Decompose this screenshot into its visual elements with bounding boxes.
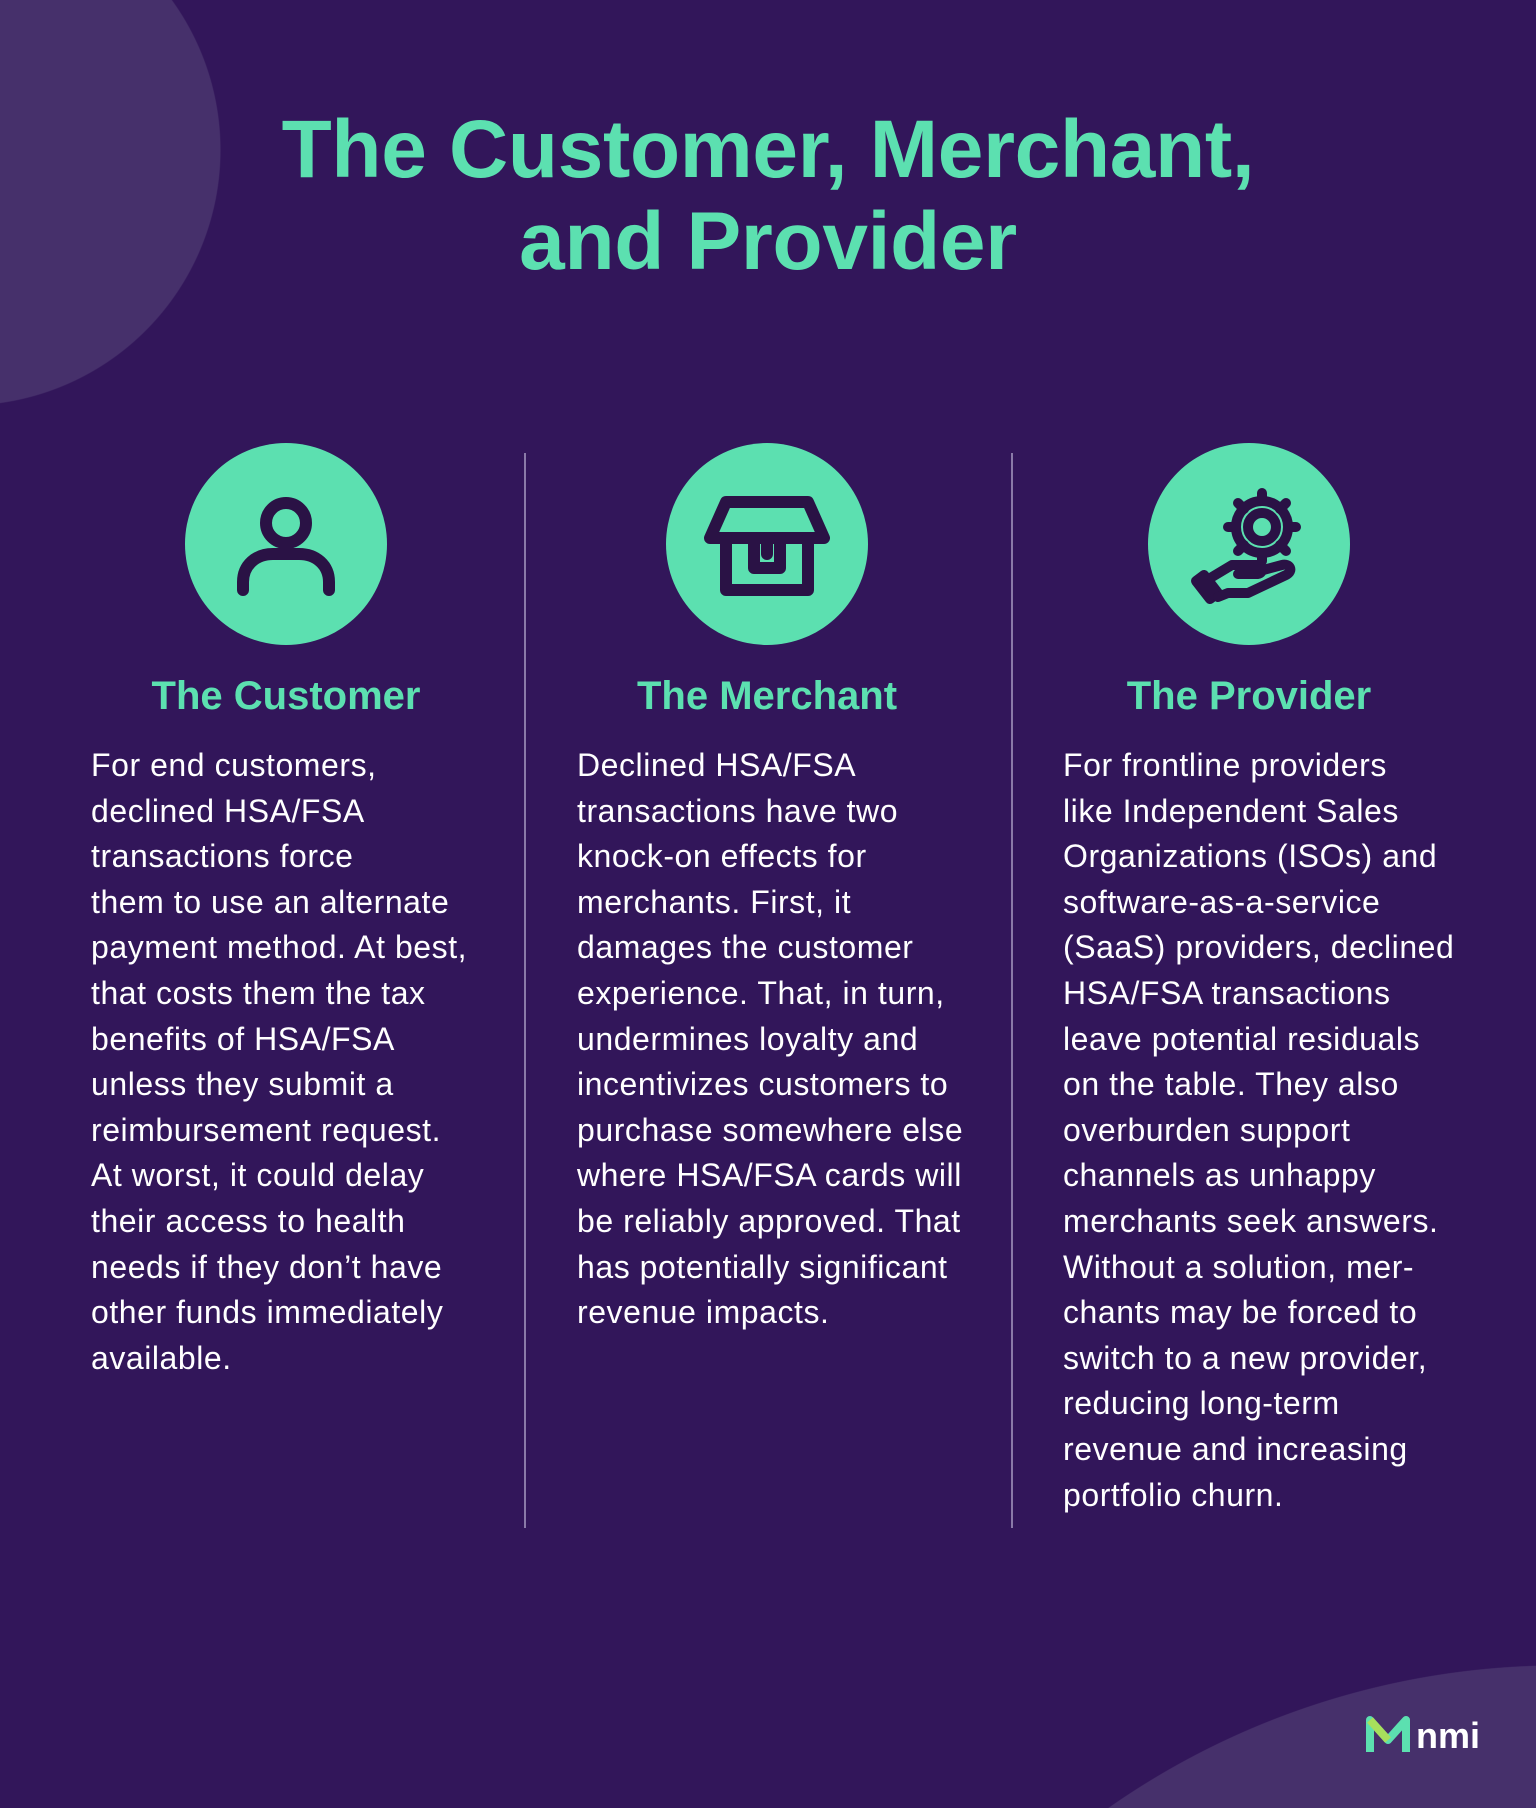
- text: merchant: where HSA/FSA cards will: [577, 1157, 962, 1193]
- heading: merchant: The Merchant: [637, 674, 897, 718]
- text: customer: that costs them the tax: [91, 975, 426, 1011]
- text: customer: them to use an alternate: [91, 884, 449, 920]
- text: provider: overburden support: [1063, 1112, 1350, 1148]
- text: merchant: Declined HSA/FSA: [577, 747, 856, 783]
- text: merchant: be reliably approved. That: [577, 1203, 961, 1239]
- text: provider: [1063, 747, 1454, 1512]
- text: merchant: undermines loyalty and: [577, 1021, 918, 1057]
- text: customer: transactions force: [91, 838, 353, 874]
- text: customer: declined HSA/FSA: [91, 793, 365, 829]
- text: provider: Without a solution, mer-: [1063, 1249, 1414, 1285]
- text: provider: chants may be forced to: [1063, 1294, 1417, 1330]
- text: customer: unless they submit a: [91, 1066, 394, 1102]
- text: customer: available.: [91, 1340, 232, 1376]
- text: provider: like Independent Sales: [1063, 793, 1399, 829]
- text: provider: HSA/FSA transactions: [1063, 975, 1391, 1011]
- icon: gear in hand: [1148, 443, 1350, 645]
- text: customer: their access to health: [91, 1203, 406, 1239]
- title: [282, 104, 1254, 287]
- text: provider: software-as-a-service: [1063, 884, 1380, 920]
- text: merchant: [577, 747, 963, 1330]
- text: merchant: has potentially significant: [577, 1249, 948, 1285]
- text: customer: payment method. At best,: [91, 929, 467, 965]
- logo: nmi: [1366, 1715, 1480, 1756]
- decorative circle bottom-right: [773, 1665, 1536, 1808]
- text: customer: needs if they don’t have: [91, 1249, 442, 1285]
- title: The Customer, Merchant,: [282, 104, 1254, 195]
- text: merchant: merchants. First, it: [577, 884, 851, 920]
- text: provider: reducing long-term: [1063, 1385, 1340, 1421]
- text: provider: channels as unhappy: [1063, 1157, 1376, 1193]
- logo: nmi: nmi: [1416, 1715, 1480, 1756]
- text: provider: For frontline providers: [1063, 747, 1387, 783]
- text: customer: For end customers,: [91, 747, 377, 783]
- text: merchant: purchase somewhere else: [577, 1112, 963, 1148]
- heading: customer: The Customer: [152, 674, 420, 718]
- title: and Provider: [519, 196, 1017, 287]
- heading: provider: The Provider: [1127, 674, 1371, 718]
- text: merchant: incentivizes customers to: [577, 1066, 948, 1102]
- decorative circle top-left: [0, 0, 222, 406]
- text: customer: At worst, it could delay: [91, 1157, 424, 1193]
- text: merchant: knock-on effects for: [577, 838, 867, 874]
- text: provider: (SaaS) providers, declined: [1063, 929, 1454, 965]
- text: provider: switch to a new provider,: [1063, 1340, 1427, 1376]
- text: provider: merchants seek answers.: [1063, 1203, 1438, 1239]
- text: customer: benefits of HSA/FSA: [91, 1021, 395, 1057]
- text: customer: reimbursement request.: [91, 1112, 441, 1148]
- text: provider: leave potential residuals: [1063, 1021, 1420, 1057]
- icon: store: [666, 443, 868, 645]
- text: provider: on the table. They also: [1063, 1066, 1399, 1102]
- text: merchant: experience. That, in turn,: [577, 975, 945, 1011]
- text: provider: revenue and increasing: [1063, 1431, 1408, 1467]
- text: provider: portfolio churn.: [1063, 1476, 1283, 1512]
- text: merchant: transactions have two: [577, 793, 898, 829]
- text: merchant: damages the customer: [577, 929, 914, 965]
- icon: person: [185, 443, 387, 645]
- text: provider: Organizations (ISOs) and: [1063, 838, 1437, 874]
- text: merchant: revenue impacts.: [577, 1294, 829, 1330]
- text: customer: other funds immediately: [91, 1294, 443, 1330]
- text: customer: [91, 747, 467, 1376]
